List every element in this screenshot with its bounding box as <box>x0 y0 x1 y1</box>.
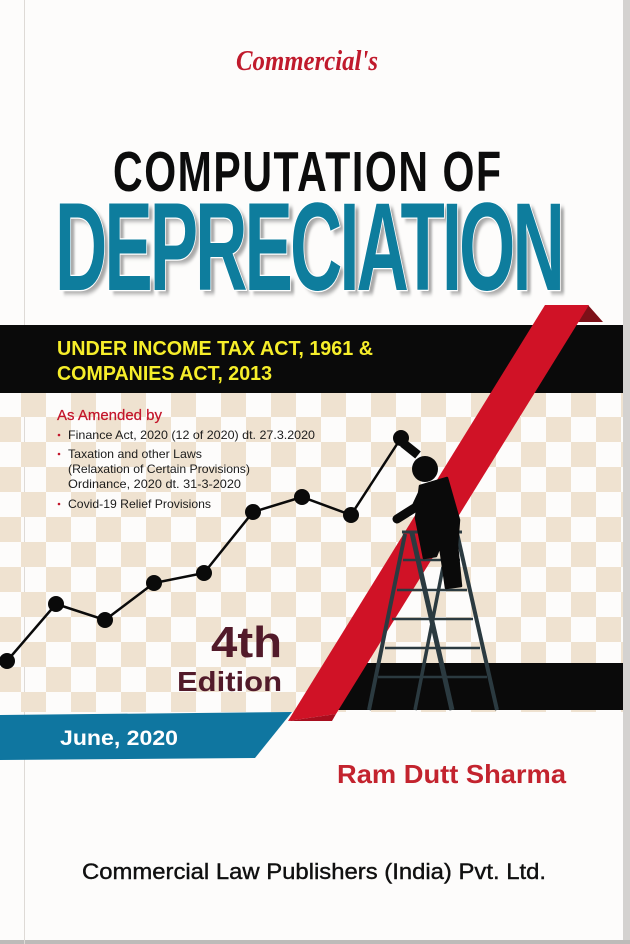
publisher: Commercial Law Publishers (India) Pvt. Ltd. <box>82 859 546 884</box>
author: Ram Dutt Sharma <box>337 759 567 789</box>
list items: Finance Act, 2020 (12 of 2020) dt. 27.3.2020 <box>68 428 315 442</box>
panel: black ground band <box>330 663 623 710</box>
panel: black subtitle band <box>0 325 623 393</box>
list items: (Relaxation of Certain Provisions) <box>68 462 250 476</box>
amendments list <box>57 407 315 511</box>
list items <box>68 428 315 511</box>
red diagonal ribbon <box>288 305 603 721</box>
edition text <box>177 618 282 697</box>
publisher mark: Commercial's: Commercial's <box>236 45 378 77</box>
date: June, 2020 <box>60 727 178 750</box>
subtitle text <box>57 338 373 385</box>
icon: ladder <box>369 532 497 710</box>
title: Depreciation: DEPRECIATION <box>55 177 565 317</box>
subtitle text: UNDER INCOME TAX ACT, 1961 & <box>57 338 373 360</box>
list items: Covid-19 Relief Provisions <box>68 497 211 511</box>
list items: Ordinance, 2020 dt. 31-3-2020 <box>68 477 241 491</box>
heading: As Amended by: As Amended by <box>57 407 162 424</box>
edition text: 4th <box>211 618 282 667</box>
title: Computation of: COMPUTATION OF <box>113 139 501 204</box>
icon: person climbing ladder <box>397 443 461 588</box>
panel: checkerboard background <box>0 392 623 712</box>
subtitle text: COMPANIES ACT, 2013 <box>57 363 272 385</box>
panel: date ribbon <box>0 712 292 760</box>
bullets <box>58 434 60 505</box>
title: Depreciation: DEPRECIATION <box>59 181 569 321</box>
line chart <box>0 430 409 669</box>
edition text: Edition <box>177 666 282 697</box>
list items: Taxation and other Laws <box>68 447 202 461</box>
